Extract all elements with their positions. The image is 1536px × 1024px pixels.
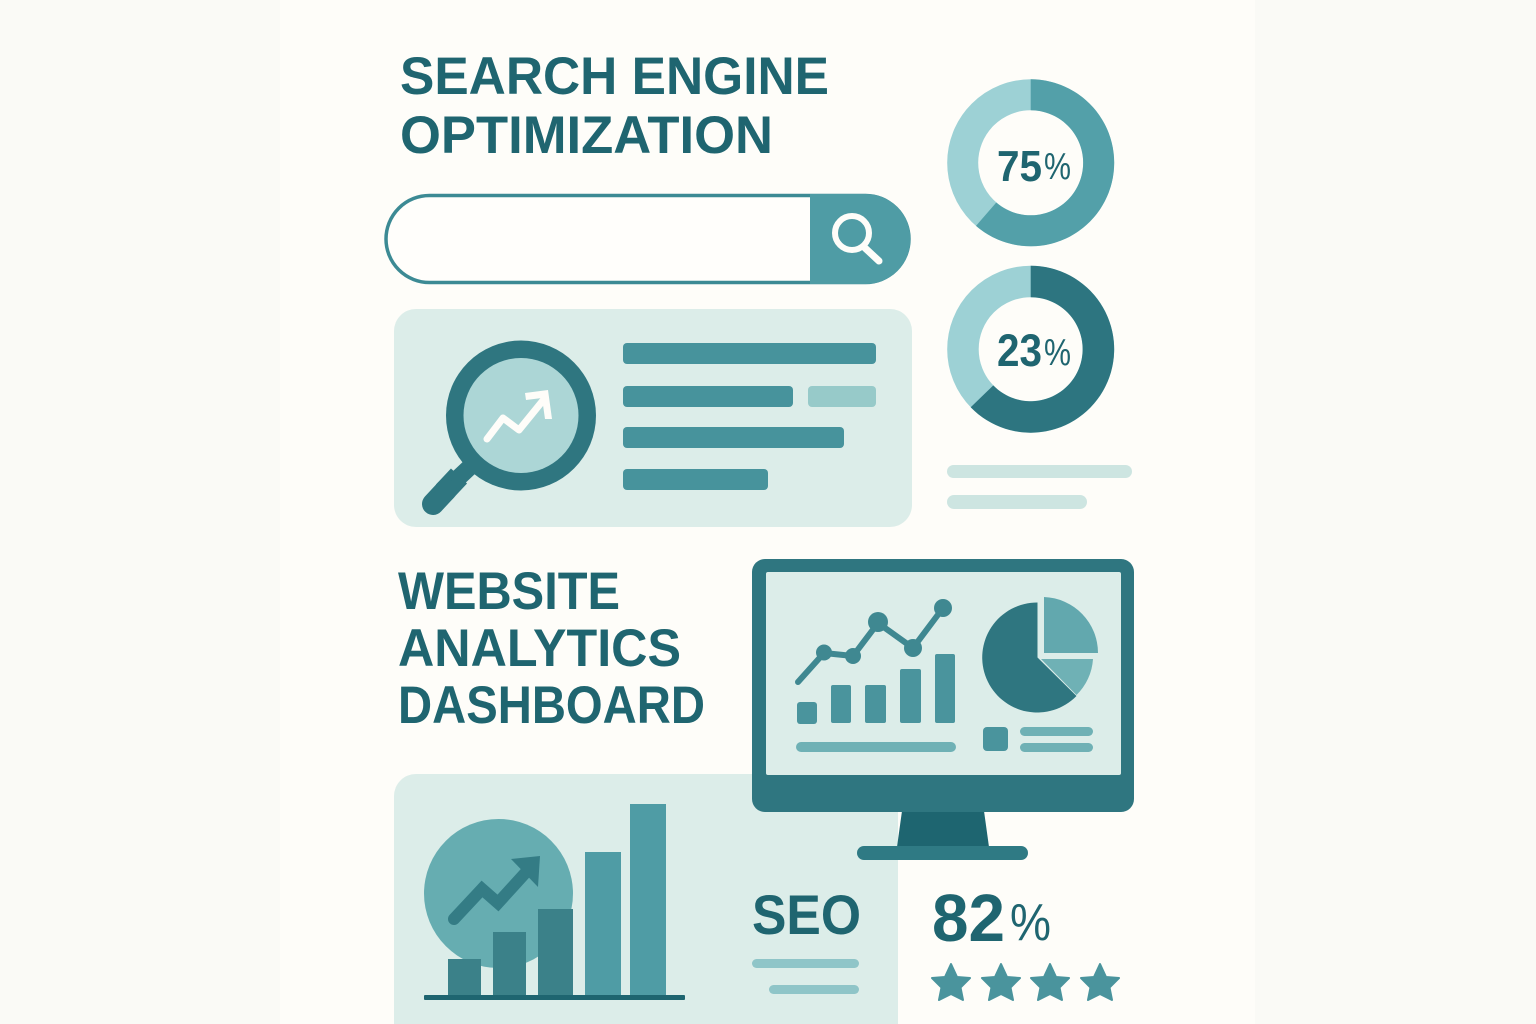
- placeholder lines under donuts: [947, 465, 1132, 509]
- panel: SEO growth: [394, 774, 898, 1024]
- donut chart: 23%: [963, 266, 1114, 433]
- heading: website analytics dashboard: WEBSITE: [398, 562, 620, 621]
- column chart: [797, 654, 955, 724]
- title: search engine optimization: SEARCH ENGINE: [400, 47, 829, 106]
- donut chart: 75%: [963, 79, 1114, 246]
- SEO placeholder lines: [752, 959, 859, 994]
- title: search engine optimization: OPTIMIZATION: [400, 106, 773, 165]
- icon: search magnifier: [835, 216, 879, 261]
- heading: website analytics dashboard: DASHBOARD: [398, 676, 705, 735]
- panel: search results: [394, 309, 912, 527]
- title: search engine optimization: [400, 47, 829, 165]
- legend: [983, 727, 1093, 752]
- donut chart: 75%: 75: [997, 142, 1042, 191]
- star rating: [932, 964, 1119, 1000]
- monitor: analytics dashboard: [752, 559, 1134, 860]
- line chart: [798, 599, 952, 682]
- pie chart: [982, 597, 1098, 712]
- result lines: [623, 343, 876, 490]
- donut chart: 75%: %: [1044, 146, 1071, 188]
- donut chart: 23%: 23: [997, 325, 1042, 376]
- stat: 82%: 82: [932, 881, 1005, 956]
- heading: website analytics dashboard: ANALYTICS: [398, 619, 681, 678]
- donut chart: 23%: %: [1044, 332, 1071, 374]
- chart caption line: [796, 742, 956, 752]
- heading: website analytics dashboard: [398, 562, 705, 735]
- SEO label: SEO: [752, 883, 861, 946]
- search bar: [386, 194, 910, 284]
- stat: 82%: [932, 881, 1051, 956]
- icon: magnifying glass with trend arrow: [433, 340, 596, 504]
- bar chart with trend arrow: [424, 804, 685, 1000]
- stat: 82%: %: [1010, 894, 1051, 952]
